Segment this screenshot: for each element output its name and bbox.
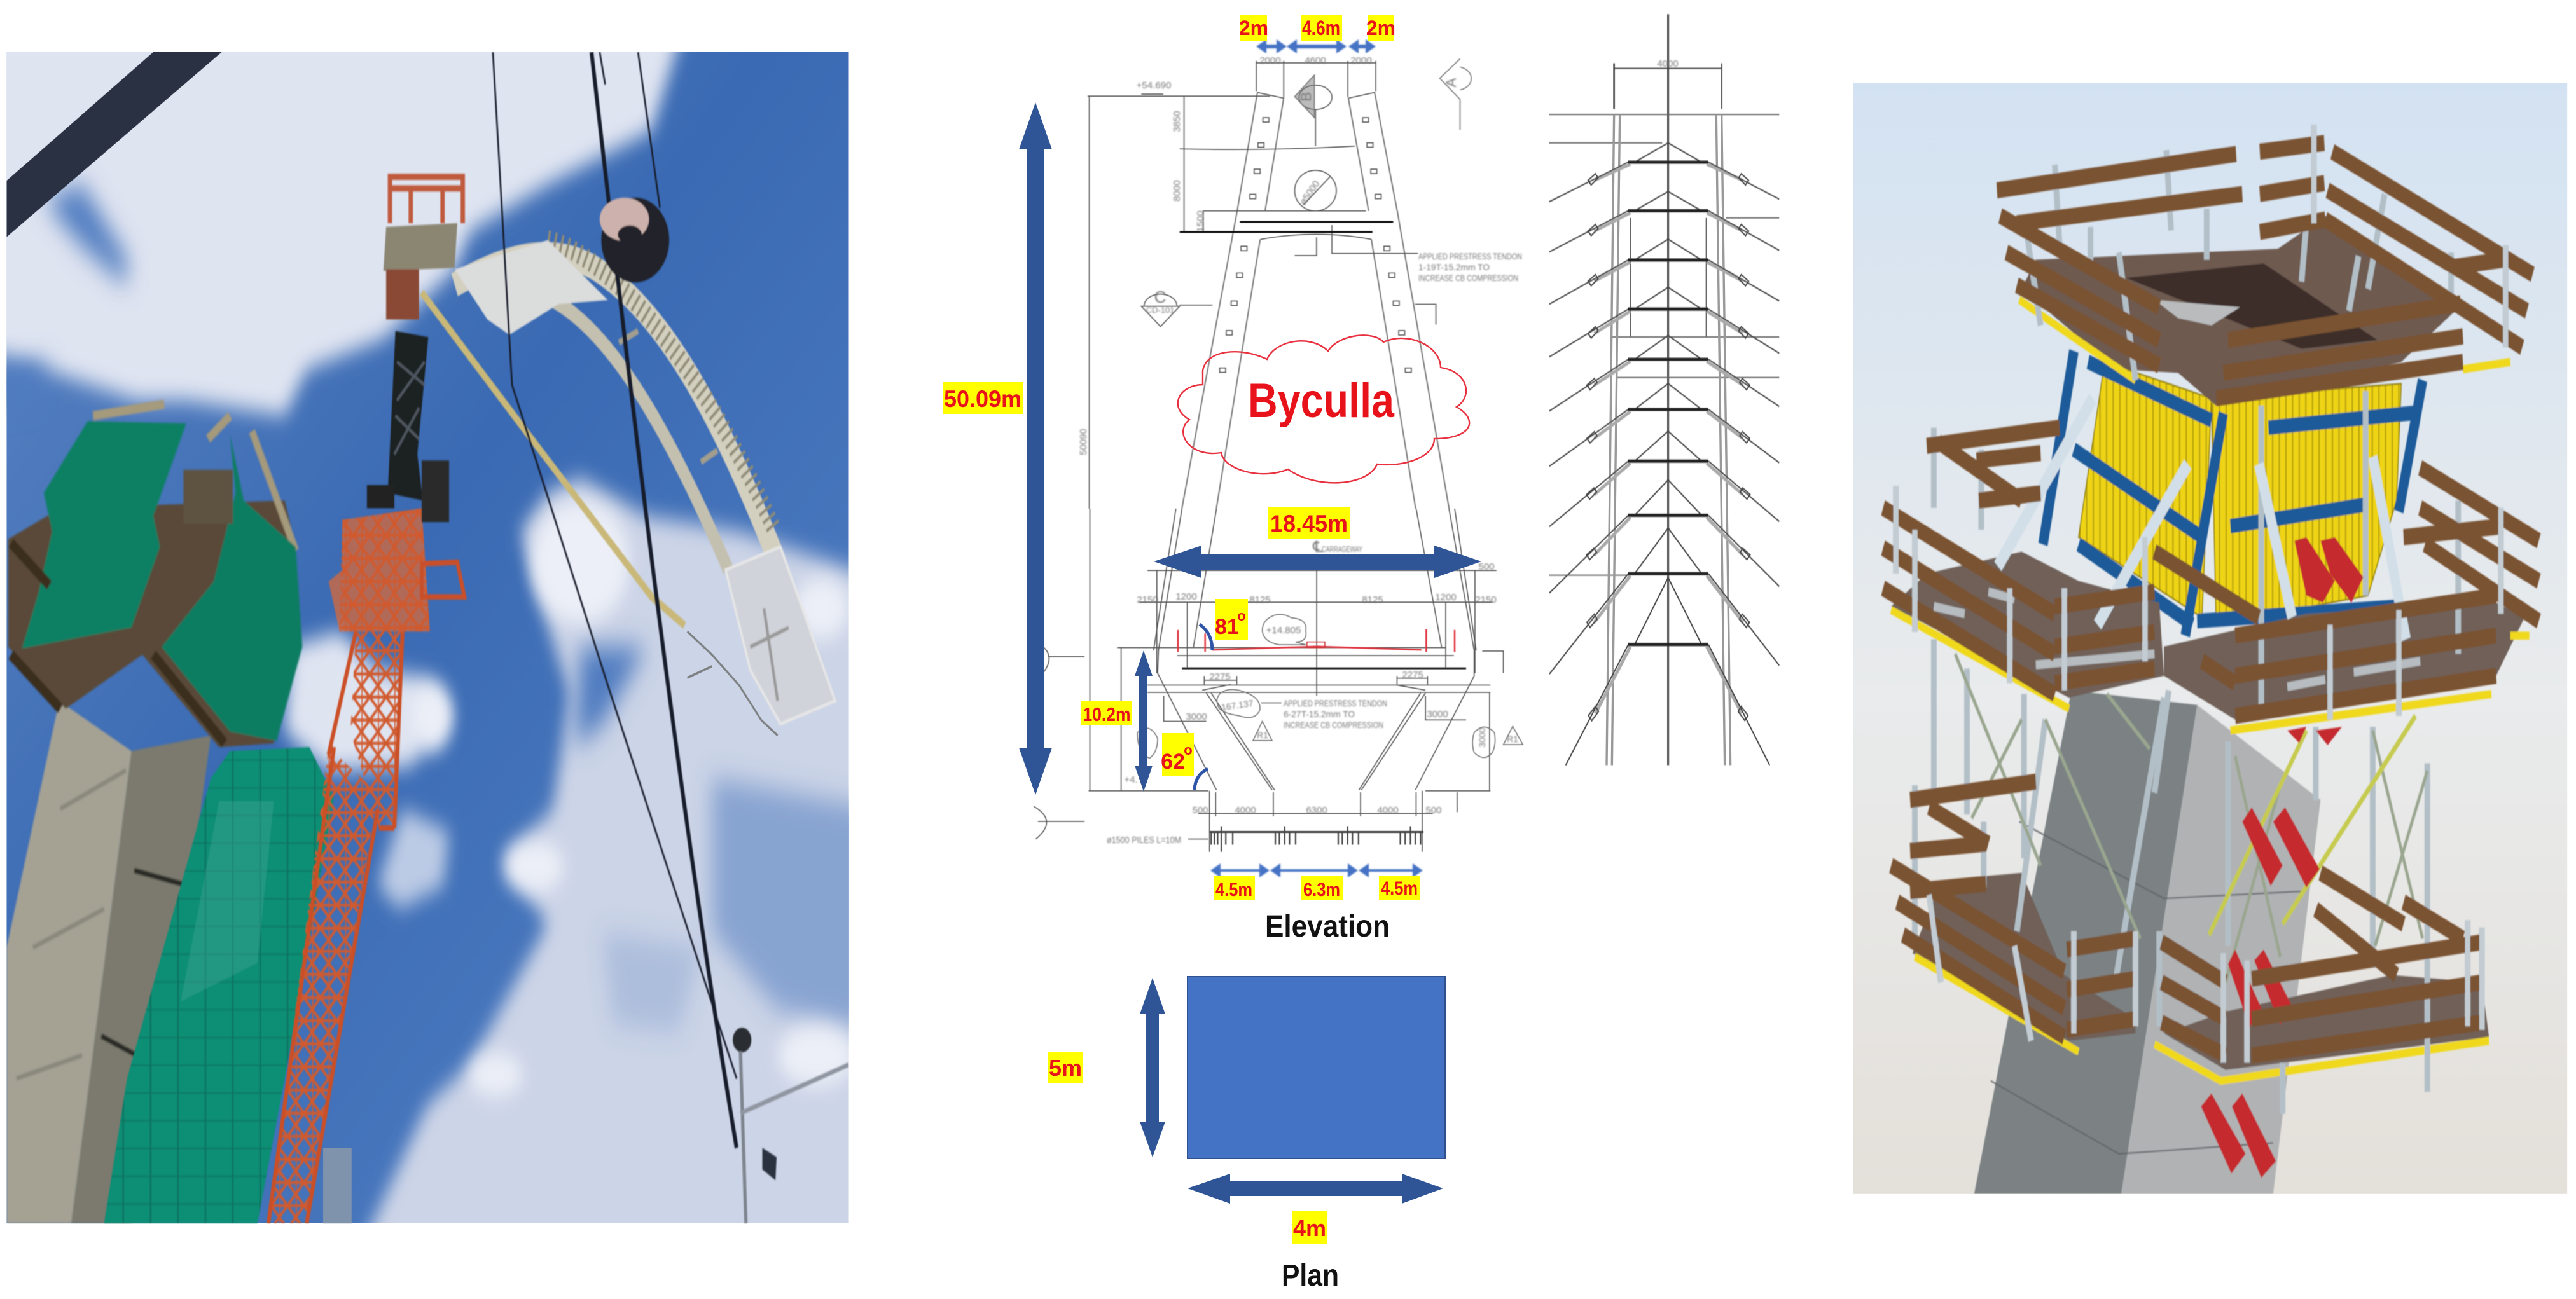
label: 81 degrees: 81 [1215, 615, 1239, 639]
dimension text: CARRAGEWAY [1322, 544, 1362, 554]
dimension text: 3000 [1427, 709, 1448, 720]
chevron tendon 10 [1566, 578, 1769, 765]
arrow: total height 50.09m [1019, 102, 1052, 795]
dense bar centres [1628, 162, 1708, 645]
pylon light face [2121, 705, 2320, 1194]
plan rectangle [1188, 977, 1445, 1158]
chevron tendon 9 [1549, 528, 1779, 674]
steel deck plates [1934, 592, 2420, 687]
chevron tendon 7 [1549, 431, 1779, 526]
yellow form panels [2079, 362, 2401, 624]
centre line and section edges [1667, 14, 1669, 765]
section B bubble [1299, 85, 1332, 109]
dimension text: A [1443, 78, 1459, 87]
label: 62 degrees [1161, 733, 1194, 776]
chevron tendon 4 [1549, 287, 1779, 357]
street lamp pole [733, 1028, 849, 1223]
lower deck floors [1913, 873, 2135, 1041]
chevron tendon 5 [1549, 336, 1779, 411]
dimension text: 3850 [1172, 111, 1182, 132]
opening dimension [1303, 109, 1330, 205]
concrete joints [1991, 821, 2306, 1154]
revision clouds [1137, 614, 1495, 758]
angle arc 62 degrees [1195, 769, 1208, 790]
strut sleeves [1595, 164, 1743, 713]
arrow: plan depth 5m [1140, 978, 1165, 1157]
upper pylon legs [1182, 61, 1449, 509]
dimension text: 4000 [1377, 805, 1399, 816]
arrow 4.5m left [1210, 863, 1270, 877]
dimension text: 167.137 [1221, 698, 1254, 712]
dimension text: 1200 [1175, 591, 1197, 602]
steel scaffold posts and ties [1896, 125, 2505, 1114]
dimension text: B [1298, 92, 1314, 101]
dimension text: 8125 [1362, 595, 1383, 605]
label: 62 degrees: o [1184, 742, 1193, 758]
shaft opening in deck [2126, 263, 2378, 349]
side elevation drawing with chevron tendons [1549, 14, 1779, 765]
rope [422, 292, 684, 626]
sky [6, 52, 849, 1223]
tendon note lower: APPLIED PRESTRESS TENDON [1284, 698, 1387, 708]
arrow: width 18.45m [1154, 546, 1481, 578]
dimension 4000 arrow line [1614, 68, 1722, 69]
dimension text: R1 [1257, 730, 1268, 740]
render background [1853, 83, 2567, 1194]
label: 4m: 4m [1293, 1215, 1326, 1241]
dimension text: 2275 [1209, 671, 1231, 682]
label: 6.3m: 6.3m [1303, 879, 1340, 900]
group: orange tower crane mast [268, 508, 464, 1223]
dimension text: 4000 [1235, 805, 1256, 816]
section arrows [1034, 648, 1504, 839]
level lines [1089, 509, 1497, 791]
Byculla text: Byculla [1248, 374, 1395, 428]
dimension text: 2275 [1402, 670, 1423, 680]
dimension text: 6300 [1306, 805, 1327, 816]
section A marker [1440, 59, 1471, 130]
chevron tendon 1 [1549, 143, 1779, 202]
label: 10.2m: 10.2m [1083, 703, 1131, 725]
photo: pylon arch lifted by crane [0, 23, 876, 1271]
group: concrete pier [6, 701, 211, 1223]
label: 62 degrees: 62 [1161, 750, 1185, 774]
section B marker [1294, 75, 1314, 118]
level and dimension lines [1088, 94, 1418, 509]
tag line [688, 631, 778, 736]
opening circle [1294, 170, 1336, 211]
brown timber guard rails: top platform [1997, 143, 2533, 399]
label: 4.5m left: 4.5m [1215, 879, 1252, 900]
dimension text: 50090 [1078, 429, 1089, 455]
tendon note upper: 1-19T-15.2mm TO [1418, 262, 1490, 272]
label: 5m: 5m [1049, 1055, 1082, 1081]
elevation drawing: lower pylon and foundation linework [1034, 509, 1523, 852]
pylon dark face [1974, 691, 2197, 1194]
arrow: plan width 4m [1188, 1174, 1443, 1204]
lower pylon legs [1154, 509, 1476, 790]
median [1307, 642, 1325, 648]
diagonal braces [1955, 654, 2427, 982]
clouds [0, 23, 876, 1271]
group: lower green net stair tower [104, 747, 334, 1223]
dimension text: 3000 [1477, 727, 1487, 748]
web lines [1607, 114, 1731, 765]
brown timber guard rails: lower platform [1891, 781, 2482, 1055]
tendon note lower [1284, 698, 1387, 730]
blue dimension arrows bottom [1210, 863, 1423, 877]
heading: Plan: Plan [1282, 1259, 1339, 1293]
dimension text: 3000 [1186, 711, 1207, 722]
group: lifted precast arch segment [455, 240, 835, 724]
tendon note upper: INCREASE CB COMPRESSION [1418, 273, 1518, 283]
piles [1211, 827, 1420, 852]
top deck floor [2021, 216, 2463, 406]
group: upper scaffold with green net [8, 404, 302, 747]
pile cap and foundation [1198, 791, 1433, 852]
label: 18.45m: 18.45m [1270, 511, 1348, 537]
chevron tendon 8 [1549, 480, 1779, 593]
arrow 4.6m [1287, 39, 1347, 53]
level lines [1549, 114, 1779, 575]
dimension text [1078, 55, 1518, 816]
arrow 4.5m right [1359, 863, 1423, 877]
label: 50.09m: 50.09m [944, 386, 1021, 412]
blue waler frames [2043, 351, 2423, 636]
group: black mast and counterweight [367, 177, 463, 522]
R1 markers [1253, 721, 1523, 745]
dimension text: +14.805 [1266, 625, 1301, 636]
angle arc 81 degrees [1200, 624, 1212, 650]
dimension text: 4600 [1305, 55, 1326, 66]
dimension text: R1 [1507, 734, 1518, 744]
red anchor wedges [2201, 537, 2364, 1178]
dimension text 4000: 4000 [1657, 58, 1679, 69]
chevron tendon 2 [1549, 191, 1779, 252]
pile note: ø1500 PILES L=10M [1107, 835, 1181, 846]
dimension text: 2150 [1137, 595, 1158, 605]
sky holes [6, 184, 876, 1032]
red deck profile and barriers [1178, 629, 1455, 652]
dimension text: +4. [1124, 774, 1138, 785]
steel rail posts over timber [1896, 125, 2505, 1062]
pulley block [600, 198, 669, 282]
arrow: height 10.2m [1135, 650, 1153, 792]
label: 2m right: 2m [1366, 17, 1395, 39]
crane and power cables [493, 52, 737, 1148]
elevation annotations in drawing [1078, 55, 1522, 846]
yellow green tie rods [2209, 716, 2416, 935]
yellow undersides of platforms [1891, 300, 2530, 1081]
chevron tendon 6 [1549, 383, 1779, 466]
dimension text: 2150 [1475, 595, 1497, 605]
dimension text: ℄ [1312, 539, 1323, 556]
crane boom [6, 52, 222, 237]
brown timber guard rails: middle platform [1883, 428, 2539, 716]
tendon note upper [1418, 251, 1522, 283]
pale pylon core visible in opening [2154, 300, 2240, 326]
dimension text: +54.690 [1137, 80, 1171, 91]
mid deck floors [1891, 552, 2164, 698]
white push-pull props [1998, 399, 2406, 639]
bright cloud tops [413, 500, 854, 1096]
tendon note lower: 6-27T-15.2mm TO [1284, 709, 1355, 719]
dimension text: 500 [1478, 561, 1495, 572]
dimension text: C [1154, 287, 1166, 306]
thick section line [1180, 222, 1393, 232]
dimension text: CD-101 [1146, 305, 1174, 315]
arrow 6.3m [1270, 863, 1358, 877]
thick cross head [1182, 668, 1466, 670]
label: 2m left: 2m [1239, 17, 1268, 39]
dimension text: 500 [1192, 805, 1208, 816]
label: 81 degrees: o [1237, 608, 1246, 624]
dimension 4000 lines [1614, 64, 1722, 109]
dimension text: 500 [1425, 805, 1442, 816]
blue dimension arrows top [1256, 39, 1376, 53]
label: 81 degrees [1215, 599, 1248, 640]
leg sleeve squares [1220, 118, 1411, 373]
chevron tendon 3 [1549, 239, 1779, 304]
elevation drawing: upper pylon linework [1088, 59, 1471, 509]
arrow 2m left [1256, 39, 1287, 53]
label: 4.5m right: 4.5m [1381, 878, 1418, 899]
section C marker [1141, 294, 1436, 327]
label: 4.6m: 4.6m [1302, 17, 1340, 39]
heading: Elevation: Elevation [1265, 910, 1390, 944]
dimension text: 2000 [1350, 55, 1372, 66]
callout cloud: Byculla [1178, 335, 1469, 483]
3D render: self-climbing formwork on pylon [1853, 83, 2567, 1194]
dimension text: 8000 [1172, 180, 1182, 202]
dimension text: 1500 [1195, 210, 1206, 232]
tendon note upper: APPLIED PRESTRESS TENDON [1418, 251, 1522, 261]
building in distance [323, 1148, 352, 1223]
pile cap top line [1210, 831, 1423, 833]
dimension text: 8125 [1249, 595, 1271, 605]
dimension text: 1200 [1435, 592, 1457, 603]
tendon note lower: INCREASE CB COMPRESSION [1284, 720, 1383, 730]
dimension text: ø5000 [1298, 179, 1322, 207]
arrow 2m right [1348, 39, 1376, 53]
dimension text: 2000 [1259, 55, 1281, 66]
